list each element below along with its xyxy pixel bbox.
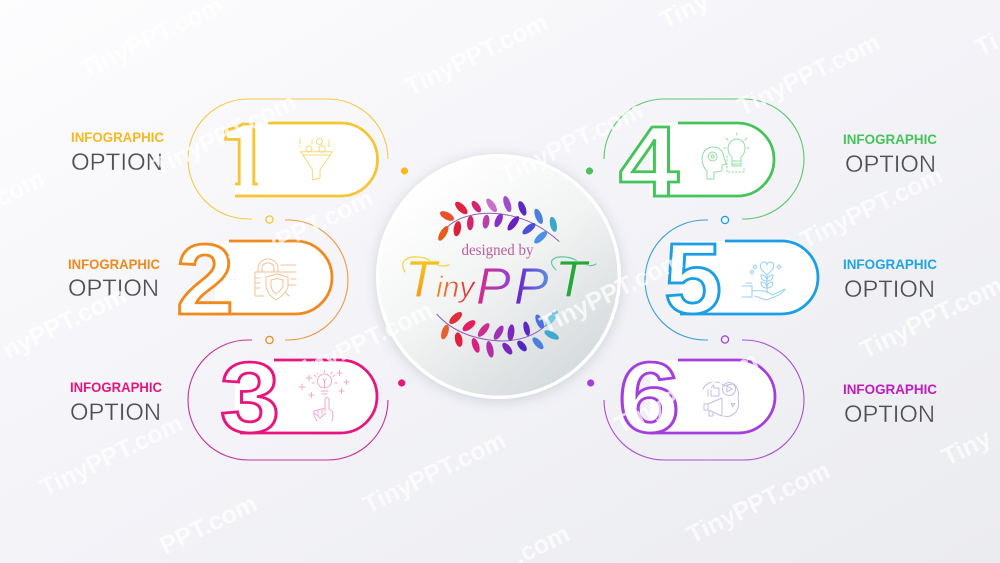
watermarks: TinyPPT.com xyxy=(226,184,377,277)
TinyPPT logo text: T xyxy=(405,251,440,309)
label: option 1: INFOGRAPHIC xyxy=(71,130,164,145)
option 6 pill group xyxy=(604,340,804,460)
TinyPPT logo text: P xyxy=(514,258,549,316)
connector circle: yellow xyxy=(266,216,273,223)
icon: lock and shield xyxy=(255,259,296,300)
dot: green xyxy=(586,167,593,175)
number 3: 3 xyxy=(220,342,280,454)
connector circle: blue xyxy=(721,216,729,224)
number 4: 4 xyxy=(619,106,679,218)
center disc with logo xyxy=(378,156,619,397)
number 2: 2 xyxy=(176,224,234,336)
label: option 6: INFOGRAPHIC xyxy=(843,382,937,397)
dot: purple xyxy=(587,379,594,387)
watermarks: TinyPPT.com xyxy=(683,456,834,549)
dot: pink xyxy=(398,379,405,387)
watermarks: TinyPPT.com xyxy=(496,96,647,189)
label: option 5: OPTION xyxy=(844,276,935,303)
number 5: 5 xyxy=(664,223,722,335)
dot: yellow xyxy=(401,167,408,175)
label: option 5 xyxy=(843,257,937,303)
label: option 1 xyxy=(71,130,164,176)
label: option 4: OPTION xyxy=(845,151,936,178)
label: option 1: OPTION xyxy=(71,149,163,176)
option 1 pill group xyxy=(188,98,389,220)
TinyPPT logo text: iny xyxy=(436,271,476,304)
watermarks: TinyPPT.com xyxy=(733,28,884,121)
TinyPPT logo text: P xyxy=(476,258,511,316)
label: option 5: INFOGRAPHIC xyxy=(843,257,937,272)
icon: hand and plant xyxy=(742,262,785,300)
number 6: 6 xyxy=(618,342,680,454)
label: option 2 xyxy=(68,257,160,302)
icon: funnel xyxy=(300,138,333,180)
top laurel wreath xyxy=(436,195,559,245)
watermarks: PPT.com xyxy=(156,489,261,560)
icon: megaphone and blob xyxy=(702,382,739,416)
label: option 6 xyxy=(843,382,937,428)
decorative swash strokes xyxy=(403,257,596,272)
label: option 6: OPTION xyxy=(844,401,935,428)
watermarks: TinyPPT.com xyxy=(286,296,437,389)
label: option 3: INFOGRAPHIC xyxy=(70,380,162,395)
designed by text: designed by xyxy=(462,242,534,259)
icon: head and bulb xyxy=(702,133,749,179)
watermarks: TinyPPT.com xyxy=(611,346,762,439)
option 4 pill group xyxy=(604,99,804,219)
watermarks: TinyPPT.com xyxy=(36,409,187,502)
watermarks: TinyPPT.com xyxy=(536,246,687,339)
label: option 3 xyxy=(70,380,162,426)
icon: idea finger xyxy=(299,370,349,421)
connector circle: orange xyxy=(266,336,273,344)
TinyPPT logo text: T xyxy=(555,251,590,309)
option 3 pill group xyxy=(188,340,388,460)
watermarks: TinyPPT.com xyxy=(149,88,300,181)
number 1: 1 xyxy=(215,80,274,225)
option 5 pill group xyxy=(645,220,818,340)
TinyPPT logo text xyxy=(405,251,590,316)
label: option 2: OPTION xyxy=(68,275,159,302)
watermarks: TinyPPT.com xyxy=(796,161,947,254)
watermarks: TinyPPT.com xyxy=(401,8,552,101)
watermarks: nyPPT.com xyxy=(0,281,131,365)
bottom laurel wreath xyxy=(437,309,560,358)
watermarks: TinyPPT.com xyxy=(359,426,510,519)
connector circle: purple xyxy=(721,336,729,343)
option 2 pill group xyxy=(176,220,348,340)
watermarks: Tiny xyxy=(937,424,996,472)
label: option 2: INFOGRAPHIC xyxy=(68,257,160,272)
label: option 3: OPTION xyxy=(70,399,161,426)
label: option 4: INFOGRAPHIC xyxy=(843,132,937,147)
label: option 4 xyxy=(843,132,937,178)
